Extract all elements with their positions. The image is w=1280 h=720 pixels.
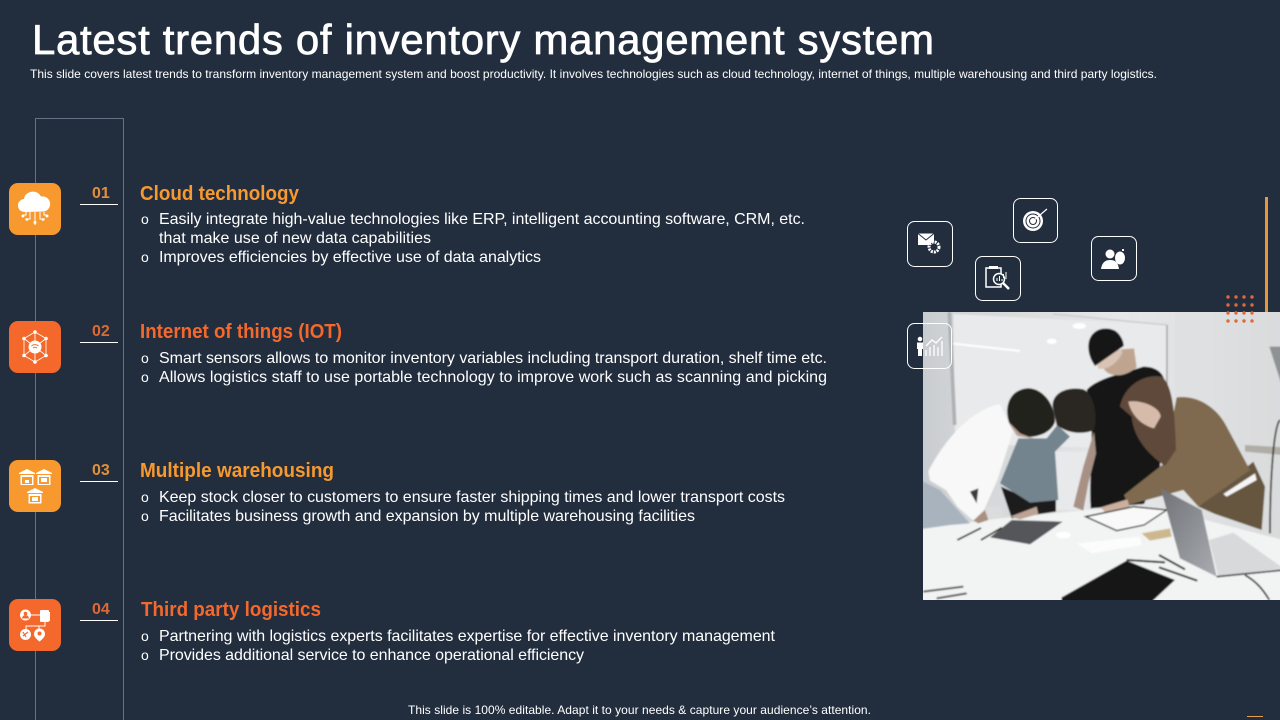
table surface bbox=[920, 509, 1280, 603]
bullet list: o bbox=[141, 249, 149, 265]
dot grid bbox=[1226, 295, 1254, 323]
timeline frame bbox=[36, 118, 124, 720]
bullet list: Keep stock closer to customers to ensure faster shipping times and lower transport costs bbox=[159, 489, 785, 506]
panel: internet of things bbox=[9, 321, 827, 386]
bullet list bbox=[141, 628, 776, 664]
person: denim shirt bbox=[1000, 389, 1096, 519]
bullet list: Improves efficiencies by effective use of data analytics bbox=[159, 249, 541, 266]
heading: Third party logistics bbox=[141, 599, 321, 621]
icon: report with magnifier bbox=[976, 256, 1020, 300]
bullet list: o bbox=[141, 508, 149, 524]
bullet list: o bbox=[141, 211, 149, 227]
person: white shirt bbox=[920, 388, 1055, 529]
person: black shirt bbox=[1073, 329, 1165, 511]
bullet list: that make use of new data capabilities bbox=[159, 230, 431, 247]
footer note: This slide is 100% editable. Adapt it to your needs & capture your audience’s attention. bbox=[408, 703, 871, 717]
title: Latest trends of inventory management system bbox=[32, 16, 934, 63]
heading: Multiple warehousing bbox=[140, 460, 334, 482]
bullet list: o bbox=[141, 369, 149, 385]
icon: person with money bag bbox=[1092, 236, 1136, 280]
bullet list: o bbox=[141, 489, 149, 505]
bullet list: o bbox=[141, 628, 149, 644]
bullet list: o bbox=[141, 647, 149, 663]
bullet list bbox=[141, 489, 785, 525]
photo: team around a table bbox=[920, 310, 1280, 603]
table items bbox=[923, 488, 1280, 603]
panel: multiple warehousing bbox=[9, 460, 785, 525]
heading: Internet of things (IOT) bbox=[140, 321, 342, 343]
number 03: 03 bbox=[92, 462, 110, 479]
icon: logistics network bbox=[9, 599, 61, 651]
icon: warehouses bbox=[9, 460, 61, 512]
number 02: 02 bbox=[92, 323, 110, 340]
icon: iot network bbox=[9, 321, 61, 373]
icon: mail with gear bbox=[908, 222, 952, 266]
number 01: 01 bbox=[92, 185, 110, 202]
bullet list: o bbox=[141, 350, 149, 366]
panel: third party logistics bbox=[9, 599, 776, 664]
bullet list: Allows logistics staff to use portable technology to improve work such as scanning and picking bbox=[159, 369, 827, 386]
bullet list: Smart sensors allows to monitor inventory variables including transport duration, shelf time etc. bbox=[159, 350, 827, 367]
subtitle: This slide covers latest trends to transform inventory management system and boost productivity. It involves technologies such as cloud technology, internet of things, multiple warehousing and third party logistics. bbox=[30, 67, 1157, 81]
bullet list: Provides additional service to enhance operational efficiency bbox=[159, 647, 584, 664]
icon: target bbox=[1014, 198, 1058, 242]
panel: cloud technology bbox=[9, 183, 805, 266]
icon: person with growth chart bbox=[908, 324, 952, 368]
bullet list bbox=[141, 211, 805, 266]
heading: Cloud technology bbox=[140, 183, 300, 205]
bullet list: Easily integrate high-value technologies like ERP, intelligent accounting software, CRM, etc. bbox=[159, 211, 805, 228]
accent bar bbox=[1265, 197, 1268, 312]
icon: cloud network bbox=[9, 183, 61, 235]
bullet list bbox=[141, 350, 827, 386]
bullet list: Partnering with logistics experts facilitates expertise for effective inventory management bbox=[159, 628, 776, 645]
bullet list: Facilitates business growth and expansion by multiple warehousing facilities bbox=[159, 508, 695, 525]
person: tweed jacket bbox=[1101, 376, 1265, 530]
number 04: 04 bbox=[92, 601, 110, 618]
